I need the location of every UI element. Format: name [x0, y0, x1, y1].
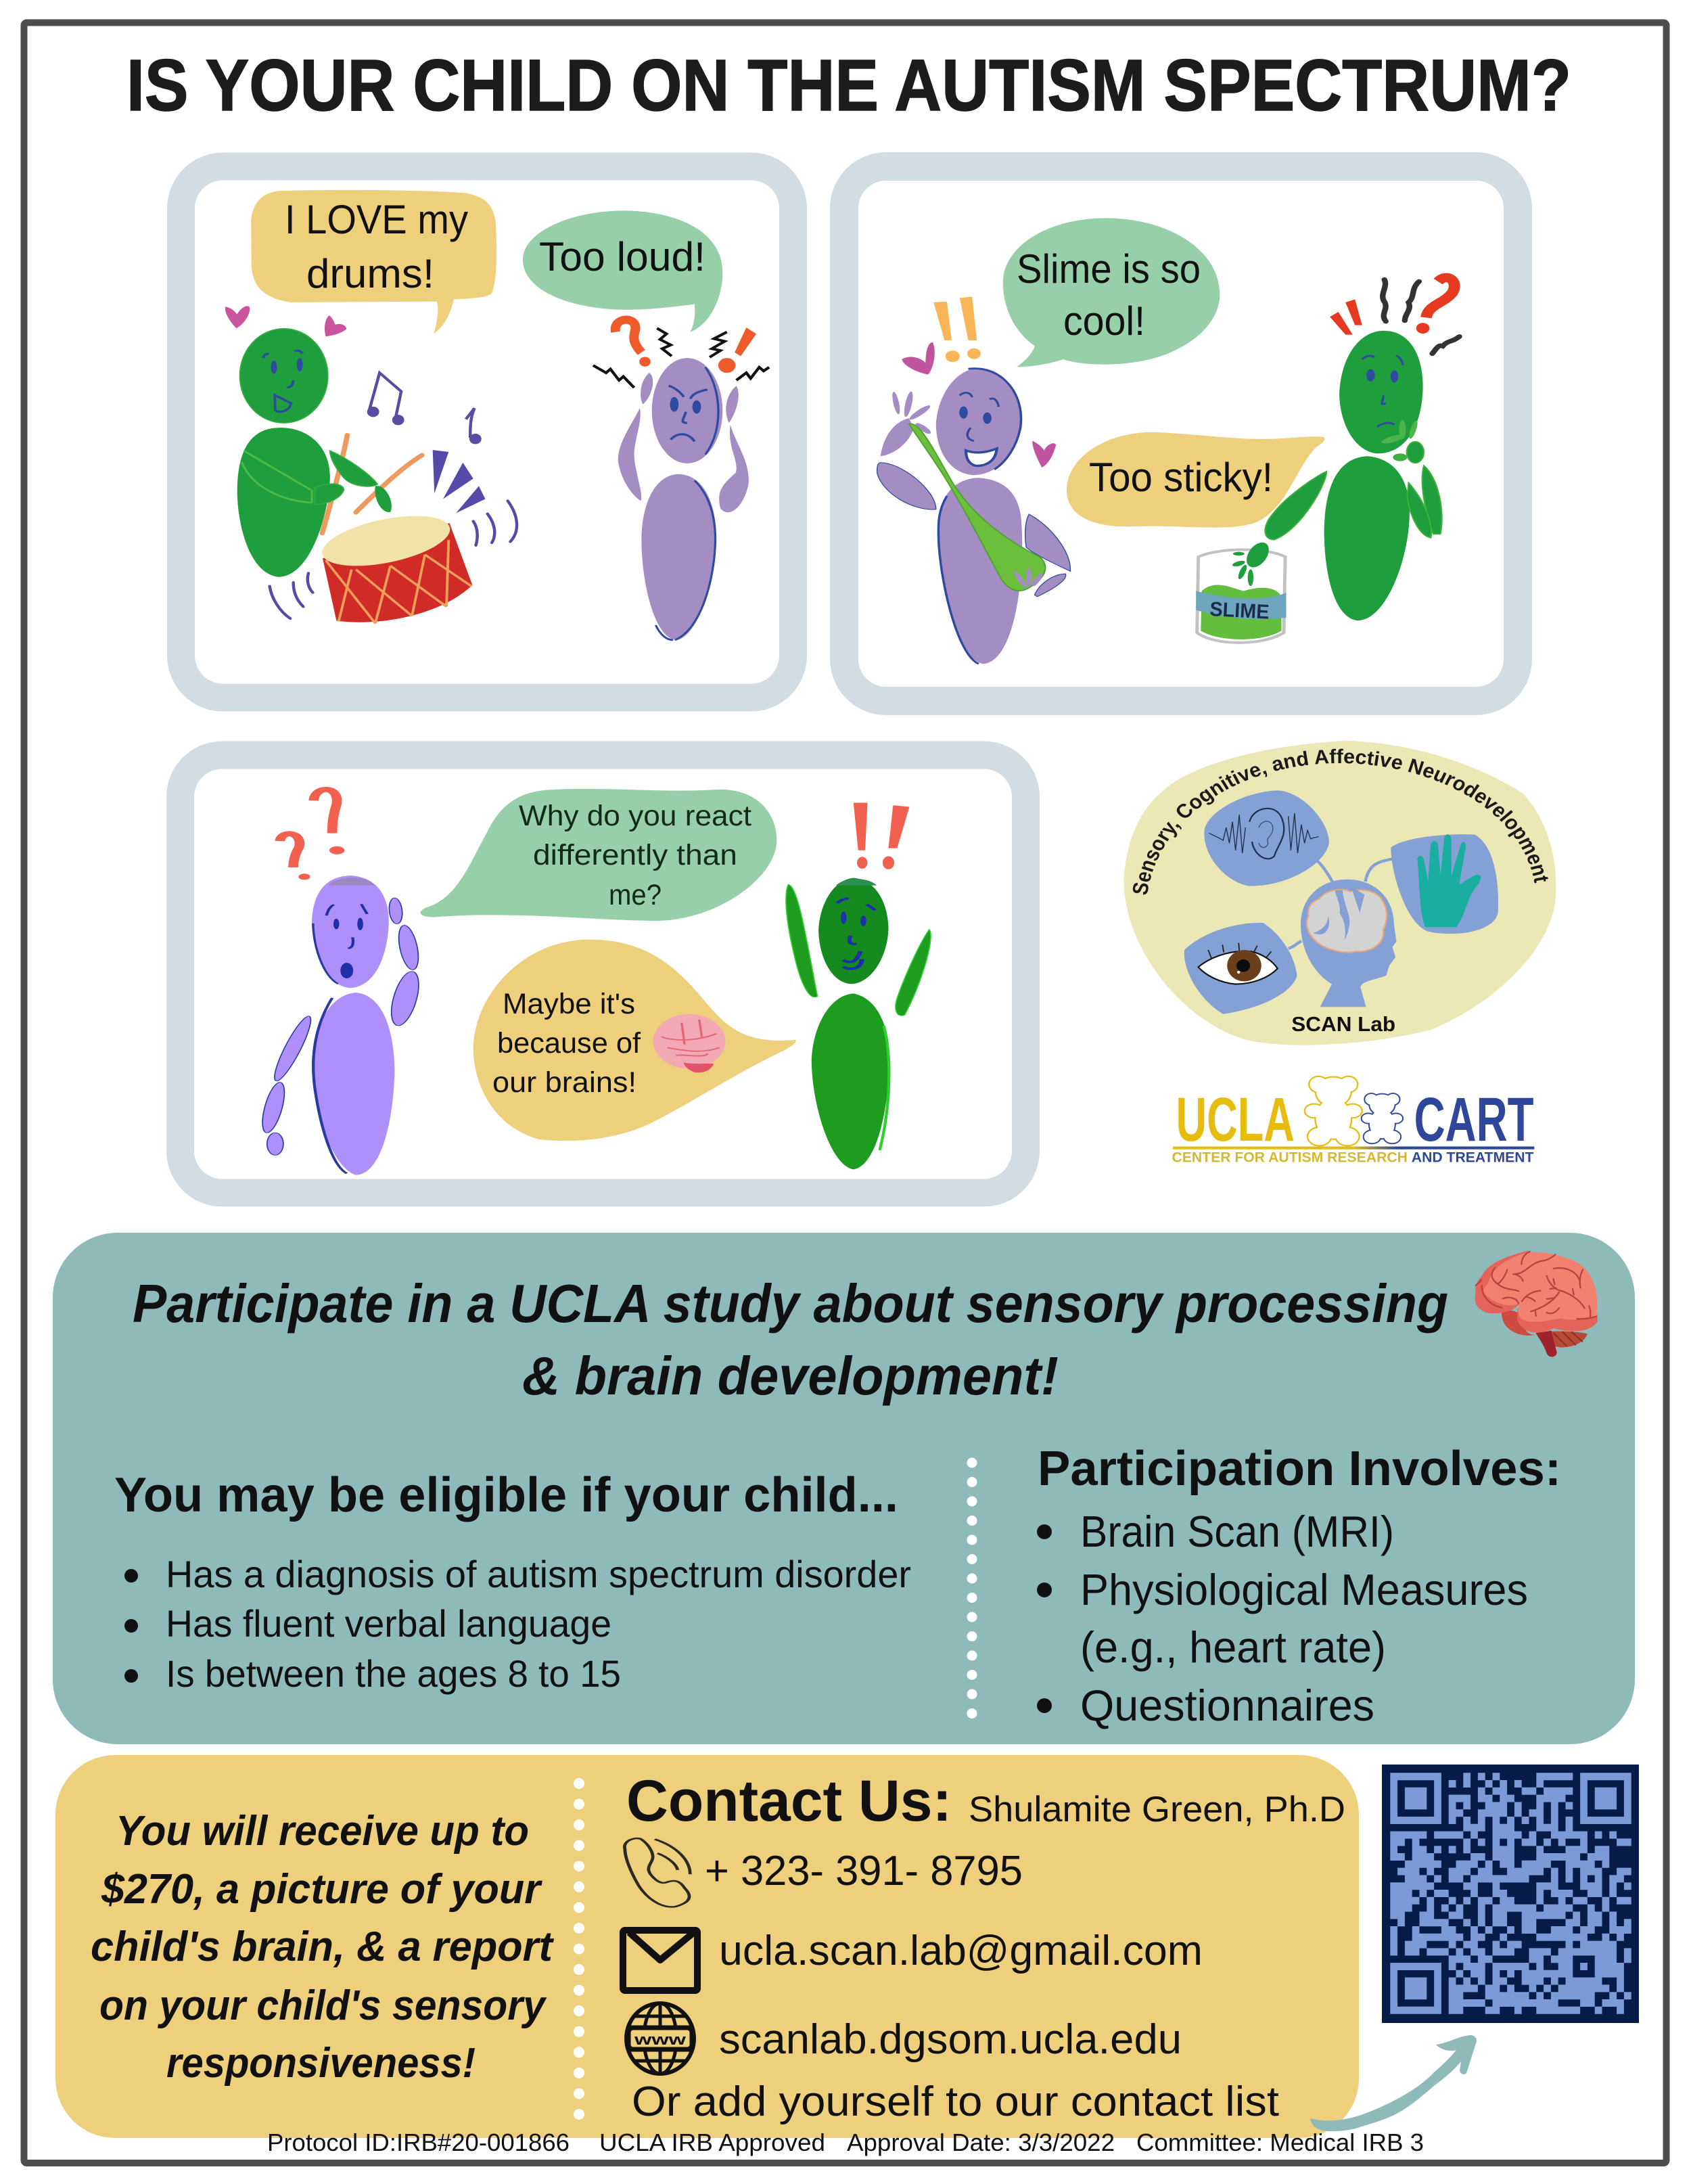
IRB footer: UCLA IRB Approved [599, 2129, 825, 2156]
logo: UCLA CART: UCLA [1176, 1085, 1295, 1154]
icon: web globe [626, 2003, 694, 2074]
contact phone: + 323- 391- 8795 [705, 1848, 1023, 1894]
musical notes and sound marks [270, 373, 517, 618]
speech bubble: too sticky [1067, 432, 1324, 528]
bullet list: participation: Physiological Measures [1080, 1565, 1528, 1614]
icon: web globe: www [634, 2031, 687, 2048]
logo: UCLA CART: CART [1414, 1085, 1533, 1154]
speech bubble: slime is so cool [1003, 218, 1220, 367]
heading: eligibility: You may be eligible if your child... [114, 1468, 898, 1522]
icon: phone [624, 1838, 690, 1907]
dotted divider [574, 1783, 584, 2114]
eye bubble [1184, 923, 1301, 1014]
bubble text: Why do you react [519, 800, 751, 832]
text block: compensation: child's brain, & a report [91, 1924, 554, 1970]
speech bubble: why do you react [421, 789, 777, 921]
bullet list: eligibility: Has a diagnosis of autism spectrum disorder [166, 1553, 911, 1595]
question, exclamation and squiggle marks [593, 320, 769, 388]
logo background blob [1124, 741, 1556, 1045]
text block: compensation: on your child's sensory [99, 1982, 547, 2029]
IRB footer [267, 2129, 1424, 2156]
heading: brain development: & brain development! [522, 1346, 1059, 1406]
yellow panel background [55, 1755, 1359, 2138]
bubble text: Slime is so [1017, 246, 1201, 292]
title: IS YOUR CHILD ON THE AUTISM SPECTRUM? [126, 44, 1571, 126]
bullet list: eligibility: Has fluent verbal language [166, 1602, 611, 1645]
bullet list: participation: Brain Scan (MRI) [1080, 1507, 1394, 1556]
drum [317, 506, 472, 623]
slime jar [1196, 540, 1287, 643]
panel: study information [53, 1233, 1635, 1744]
speech bubble: too loud [523, 210, 722, 332]
green drummer figure [237, 329, 392, 577]
curved lab name: Sensory, Cognitive, and Affective Neurodevelopment [1132, 748, 1548, 894]
bubble text: Too sticky! [1089, 455, 1273, 500]
column: eligibility [114, 1468, 911, 1695]
heading: contact us: Contact Us: [626, 1769, 952, 1834]
IRB footer: Committee: Medical IRB 3 [1136, 2129, 1424, 2156]
panel frame [181, 166, 793, 698]
bubble text: differently than [533, 839, 737, 871]
logo: SCAN Lab [1124, 740, 1556, 1165]
teal panel background [53, 1233, 1635, 1744]
purple figure with question marks [258, 790, 423, 1175]
panel: brains comic [180, 755, 1025, 1193]
SCAN Lab text: SCAN Lab [1291, 1012, 1395, 1036]
panel frame [180, 755, 1025, 1193]
bubble text: Too loud! [539, 234, 705, 279]
purple figure covering ears [618, 358, 749, 640]
illustration: drummer and covering-ears figure [225, 190, 769, 640]
orange exclamation marks and hearts [902, 297, 1056, 468]
child head with brain [1301, 880, 1397, 1007]
bullet list: eligibility: Is between the ages 8 to 15 [166, 1652, 621, 1695]
panel: drums comic [181, 166, 793, 698]
ear bubble [1204, 790, 1333, 886]
drumsticks [322, 435, 422, 533]
text block: compensation: You will receive up to [116, 1808, 529, 1855]
illustration: slime figures [877, 218, 1460, 664]
dotted divider [967, 1463, 977, 1714]
logo: UCLA CART [1172, 1077, 1534, 1165]
panel: compensation and contact [55, 1755, 1359, 2138]
contact email: ucla.scan.lab@gmail.com [719, 1928, 1203, 1974]
bubble text: because of [497, 1027, 641, 1060]
speech bubble: maybe it's because of our brains [473, 940, 796, 1141]
bullet list: participation: (e.g., heart rate) [1080, 1622, 1386, 1672]
bubble text: drums! [306, 251, 434, 296]
hearts [225, 306, 346, 336]
bubble text: I LOVE my [285, 197, 468, 242]
heading: participate: Participate in a UCLA study about sensory processing [133, 1273, 1448, 1334]
panel frame [844, 166, 1518, 701]
question, exclamation and squiggle marks [1330, 277, 1460, 354]
green figure touching slime [1265, 331, 1442, 620]
QR code [1382, 1765, 1639, 2023]
logo: UCLA CART: CENTER FOR AUTISM RESEARCH AND TREATMENT [1172, 1150, 1534, 1165]
speech bubble: I love my drums [251, 190, 496, 334]
column: participation [1037, 1442, 1561, 1730]
bubble text: me? [609, 879, 662, 911]
contact website: scanlab.dgsom.ucla.edu [719, 2016, 1182, 2063]
jar label text: SLIME [1209, 598, 1270, 624]
bullet list: participation: Questionnaires [1080, 1681, 1374, 1730]
pink brain icon [653, 1014, 725, 1072]
contact list prompt: Or add yourself to our contact list [632, 2078, 1279, 2125]
bubble text: Maybe it's [503, 988, 635, 1020]
icon: envelope [623, 1930, 697, 1990]
panel: slime comic [844, 166, 1518, 701]
icon: brain [1475, 1250, 1598, 1357]
hand bubble [1366, 834, 1498, 934]
green figure with exclamation marks [786, 803, 931, 1169]
bubble text: our brains! [492, 1066, 636, 1099]
text block: compensation [91, 1808, 554, 2087]
bubble text: cool! [1063, 298, 1145, 344]
text block: compensation: responsiveness! [166, 2040, 476, 2087]
arrow pointing to QR code [1310, 2035, 1477, 2131]
IRB footer: Approval Date: 3/3/2022 [847, 2129, 1115, 2156]
bullet list: eligibility [124, 1553, 911, 1695]
heading: participation: Participation Involves: [1038, 1442, 1561, 1496]
IRB footer: Protocol ID:IRB#20-001866 [267, 2129, 570, 2156]
purple figure holding slime [877, 367, 1070, 664]
contact name: Shulamite Green, Ph.D [969, 1790, 1345, 1829]
text block: compensation: $270, a picture of your [101, 1866, 542, 1913]
illustration: purple and green figures [258, 789, 931, 1175]
bullet list: participation [1037, 1507, 1528, 1730]
